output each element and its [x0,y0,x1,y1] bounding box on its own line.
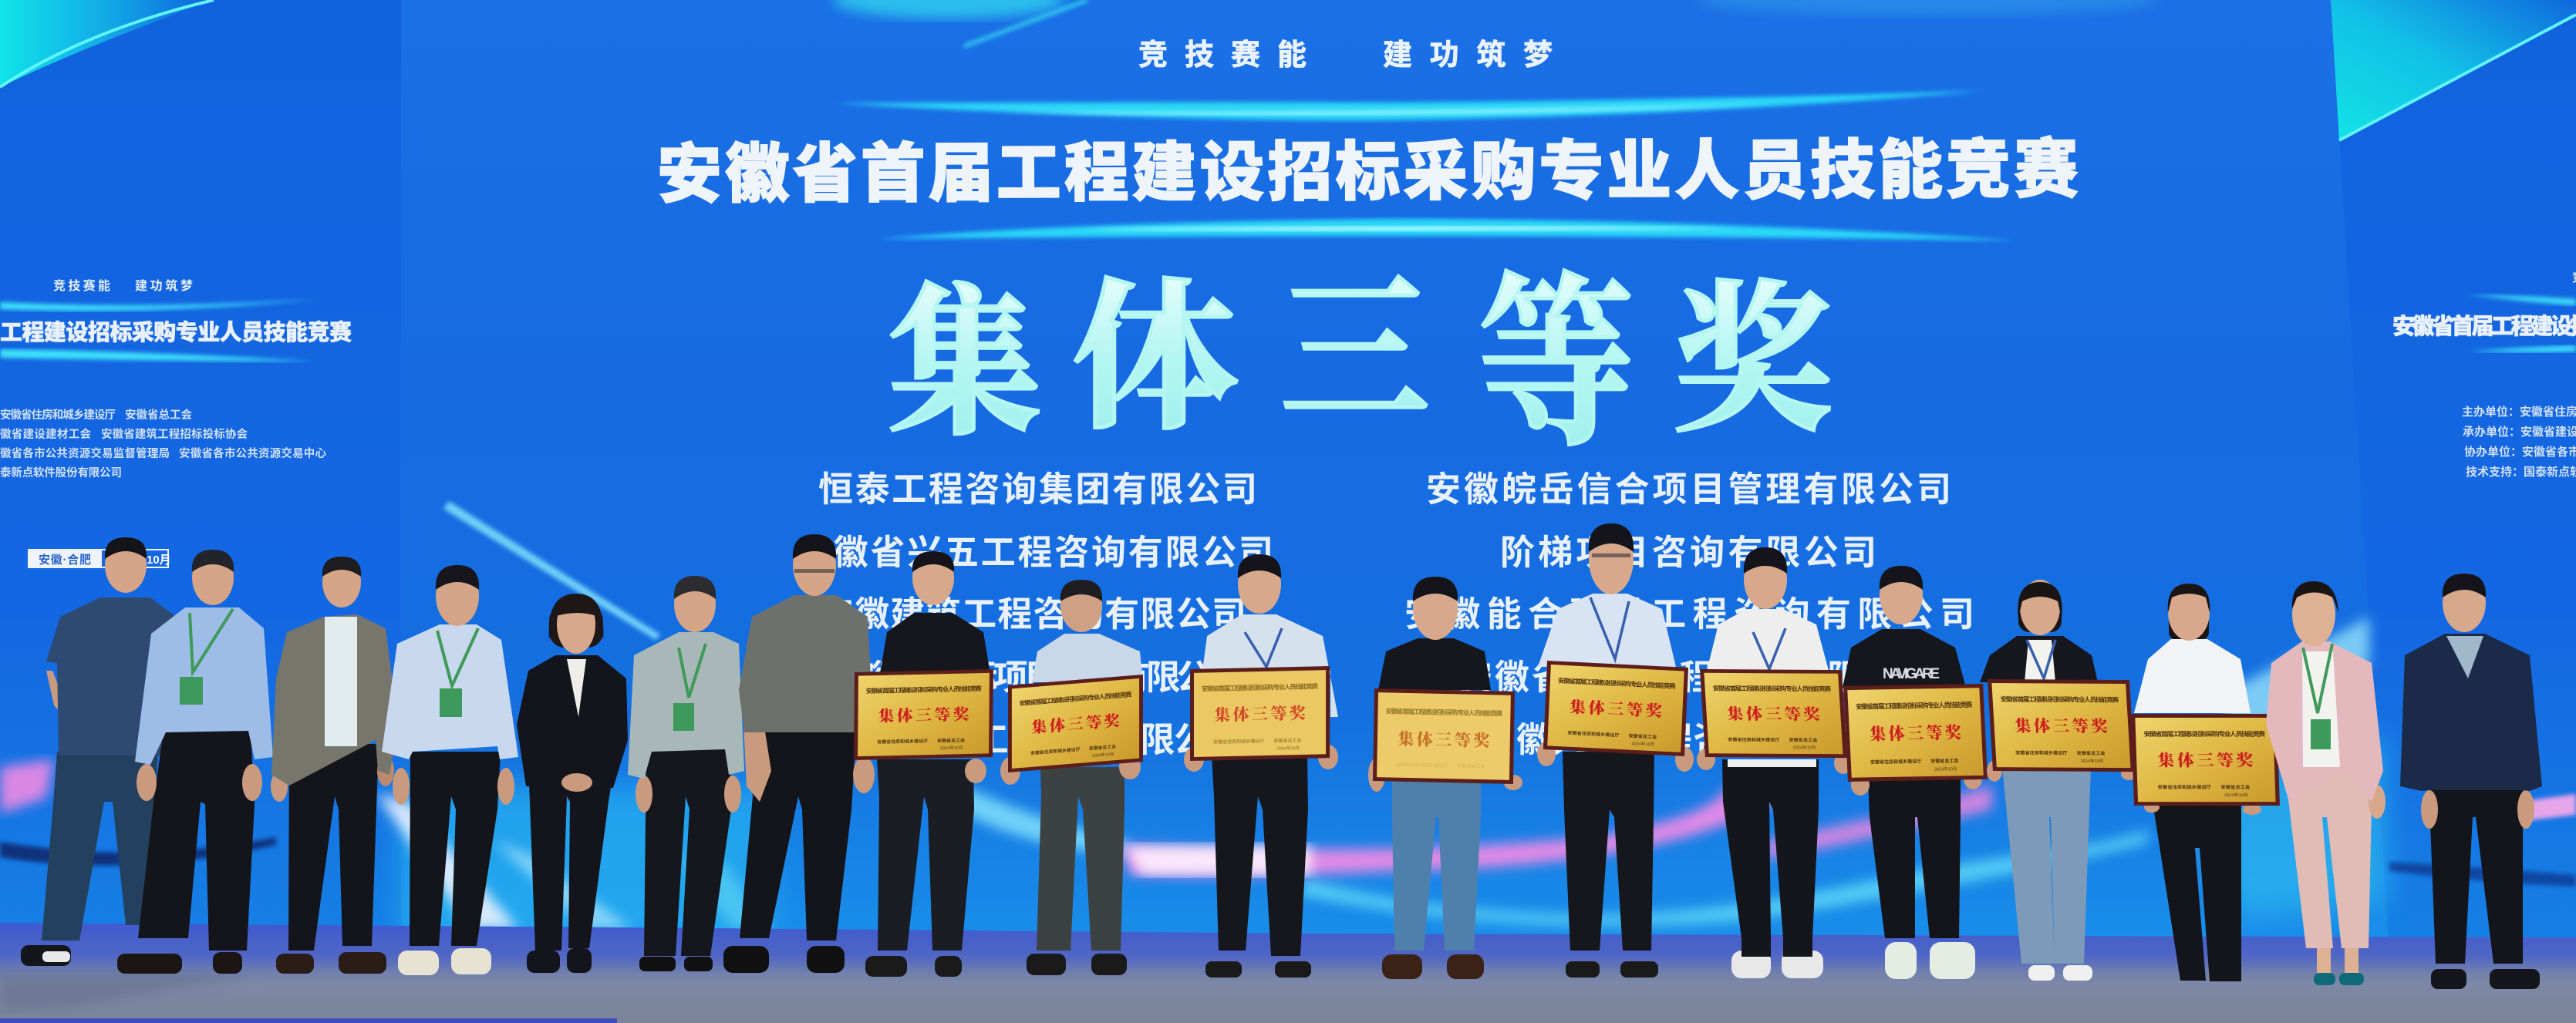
person 5 woman black blazer [517,594,628,973]
plaque 4: 安徽省首届工程建设招标采购专业人员技能竞赛 [1386,706,1503,718]
award heading: 体 [1072,271,1239,448]
plaque 2: 安徽省首届工程建设招标采购专业人员技能竞赛 [1020,691,1131,707]
plaque 1: 集体三等奖 [878,705,969,725]
left organiser text: 安徽省各市公共资源交易中心 [179,446,327,460]
left side screen content [0,278,352,567]
winners list right column [1404,469,1974,759]
row of award recipients and presenters [21,523,2542,989]
slogan: 竞技赛能 [1138,39,1307,72]
winners list right column: 阶梯项目咨询有限公司 [1500,533,1876,572]
plaque 1: 安徽省住房和城乡建设厅 安徽省总工会 [877,737,965,745]
centre screen content [657,39,2079,759]
plaque 6: 安徽省首届工程建设招标采购专业人员技能竞赛 [1713,685,1832,692]
plaque 3 [1190,666,1330,761]
location badge [29,550,171,567]
person 16 woman white shirt, plaque [2131,584,2280,981]
left slogan [53,278,193,293]
person 6 grey-green shirt [628,576,744,971]
plaque 5: 2024年10月 [1631,740,1654,747]
plaque 6 [1700,669,1847,758]
left organiser text: 徽省各市公共资源交易监督管理局 [0,446,170,460]
plaque 3: 安徽省首届工程建设招标采购专业人员技能竞赛 [1202,682,1319,692]
winners list right column: 安徽省建设工程咨询有限公司 [1458,658,1936,697]
left slogan: 竞技赛能 [53,278,110,293]
plaque 8: 2024年10月 [2080,758,2104,764]
plaque 9: 2024年10月 [2224,792,2248,798]
plaque 1: 安徽省首届工程建设招标采购专业人员技能竞赛 [866,685,983,695]
person 11 black sweater, jeans, plaque [1368,577,1522,979]
plaque 9: 安徽省首届工程建设招标采购专业人员技能竞赛 [2143,729,2266,738]
winners list right column: 安徽皖岳信合项目管理有限公司 [1426,469,1951,509]
location badge: 10月 [147,554,171,567]
slogan: 建功筑梦 [1383,39,1553,72]
plaque 3: 集体三等奖 [1214,704,1306,725]
award heading: 三 [1280,264,1429,444]
person 13 white polo, plaque [1697,547,1853,978]
top right cyan corner [2331,0,2576,140]
plaque 8: 安徽省首届工程建设招标采购专业人员技能竞赛 [2000,695,2119,704]
person 17 woman pink suit [2266,581,2385,985]
person 9 pale shirt, plaque [1000,580,1143,975]
plaque 6: 集体三等奖 [1727,705,1821,723]
winners list left column: 安徽建筑工程咨询有限公司 [819,594,1246,634]
left organiser text [0,408,327,480]
person 4 pale shirt [382,565,518,975]
person 2 blue shirt [117,550,273,974]
plaque 4: 集体三等奖 [1398,729,1490,750]
light streaks [0,501,2576,941]
winners list left column: 恒泰工程咨询集团有限公司 [818,469,1257,509]
winners list right column: 安徽大合工程咨询有限公司 [1481,720,1905,759]
award heading: 等 [1479,264,1634,468]
plaque 5: 集体三等奖 [1569,698,1663,720]
person 1 navy polo [21,537,176,966]
left organiser text: 徽省建设建材工会 [0,427,91,441]
right side screen content [2392,271,2576,479]
plaque 9: 集体三等奖 [2157,751,2254,769]
person 14 black sweatshirt NAVIGARE, plaque [1843,566,1988,979]
plaque 9 [2131,714,2280,806]
plaque 5 [1543,661,1688,756]
person 14 black sweatshirt NAVIGARE, plaque: NAVIGARE [1883,666,1940,682]
winners list left column: 安徽省兴五工程咨询有限公司 [797,533,1273,572]
person 10 pale shirt, plaque [1184,554,1338,978]
plaque 6: 2024年10月 [1792,744,1816,750]
plaque 5: 安徽省住房和城乡建设厅 安徽省总工会 [1567,730,1657,740]
plaque 2: 安徽省住房和城乡建设厅 安徽省总工会 [1030,743,1116,756]
top left cyan corner [0,0,214,87]
plaque 9: 安徽省住房和城乡建设厅 安徽省总工会 [2158,784,2250,790]
plaque 6: 安徽省住房和城乡建设厅 安徽省总工会 [1728,737,1818,743]
stage floor [0,923,2576,1023]
award heading: 奖 [1674,272,1833,451]
right organiser text [2462,405,2576,479]
plaque 2 [1008,675,1143,772]
person 7 dark grey shirt [723,534,872,973]
slogan [1138,39,1553,72]
plaque 8: 安徽省住房和城乡建设厅 安徽省总工会 [2015,749,2106,756]
plaque 1 [854,669,993,760]
left slogan: 建功筑梦 [135,278,193,293]
main title: 安徽省首届工程建设招标采购专业人员技能竞赛 [657,133,2079,210]
location badge: 安徽·合肥 [39,553,91,567]
plaque 7 [1843,684,1988,782]
plaque 8 [1988,679,2135,772]
winners list left column: 安徽省招标项目咨询有限公司 [841,658,1242,697]
glow line below title [878,219,2017,241]
winners list left column: 安徽集成工程咨询有限公司 [841,720,1242,759]
award heading: 集 [887,275,1043,455]
left title: 工程建设招标采购专业人员技能竞赛 [0,319,352,345]
person 3 grey jacket [271,557,398,974]
person 12 pale shirt blue lanyard, plaque [1537,523,1694,978]
award heading [887,264,1833,468]
person 15 woman jacket, jeans, plaque [1980,580,2136,981]
plaque 1: 2024年10月 [940,745,963,751]
left organiser text: 安徽省建筑工程招标投标协会 [101,427,248,441]
left organiser text: 安徽省总工会 [125,408,193,422]
plaque 8: 集体三等奖 [2014,716,2109,735]
person 18 navy jacket [2400,574,2542,989]
winners list left column [797,469,1273,759]
top centre glow [833,0,2160,46]
plaque 2: 集体三等奖 [1031,712,1120,737]
left organiser text: 泰新点软件股份有限公司 [0,466,122,480]
plaque 5: 安徽省首届工程建设招标采购专业人员技能竞赛 [1558,677,1677,690]
glow line above title [836,91,1982,120]
plaque 2: 2024年10月 [1092,751,1114,759]
plaque 7: 安徽省住房和城乡建设厅 安徽省总工会 [1870,758,1959,766]
plaque 7: 安徽省首届工程建设招标采购专业人员技能竞赛 [1856,700,1973,711]
plaque 4 [1373,688,1515,784]
left organiser text: 安徽省住房和城乡建设厅 [0,408,116,422]
plaque 3: 安徽省住房和城乡建设厅 安徽省总工会 [1213,737,1302,745]
plaque 4: 安徽省住房和城乡建设厅 安徽省总工会 [1397,762,1485,769]
plaque 7: 2024年10月 [1934,766,1957,772]
person 8 black polo, plaque [853,551,993,977]
plaque 7: 集体三等奖 [1870,722,1962,744]
plaque 3: 2024年10月 [1277,745,1300,752]
winners list right column: 安徽能合建设工程咨询有限公司 [1404,594,1974,634]
